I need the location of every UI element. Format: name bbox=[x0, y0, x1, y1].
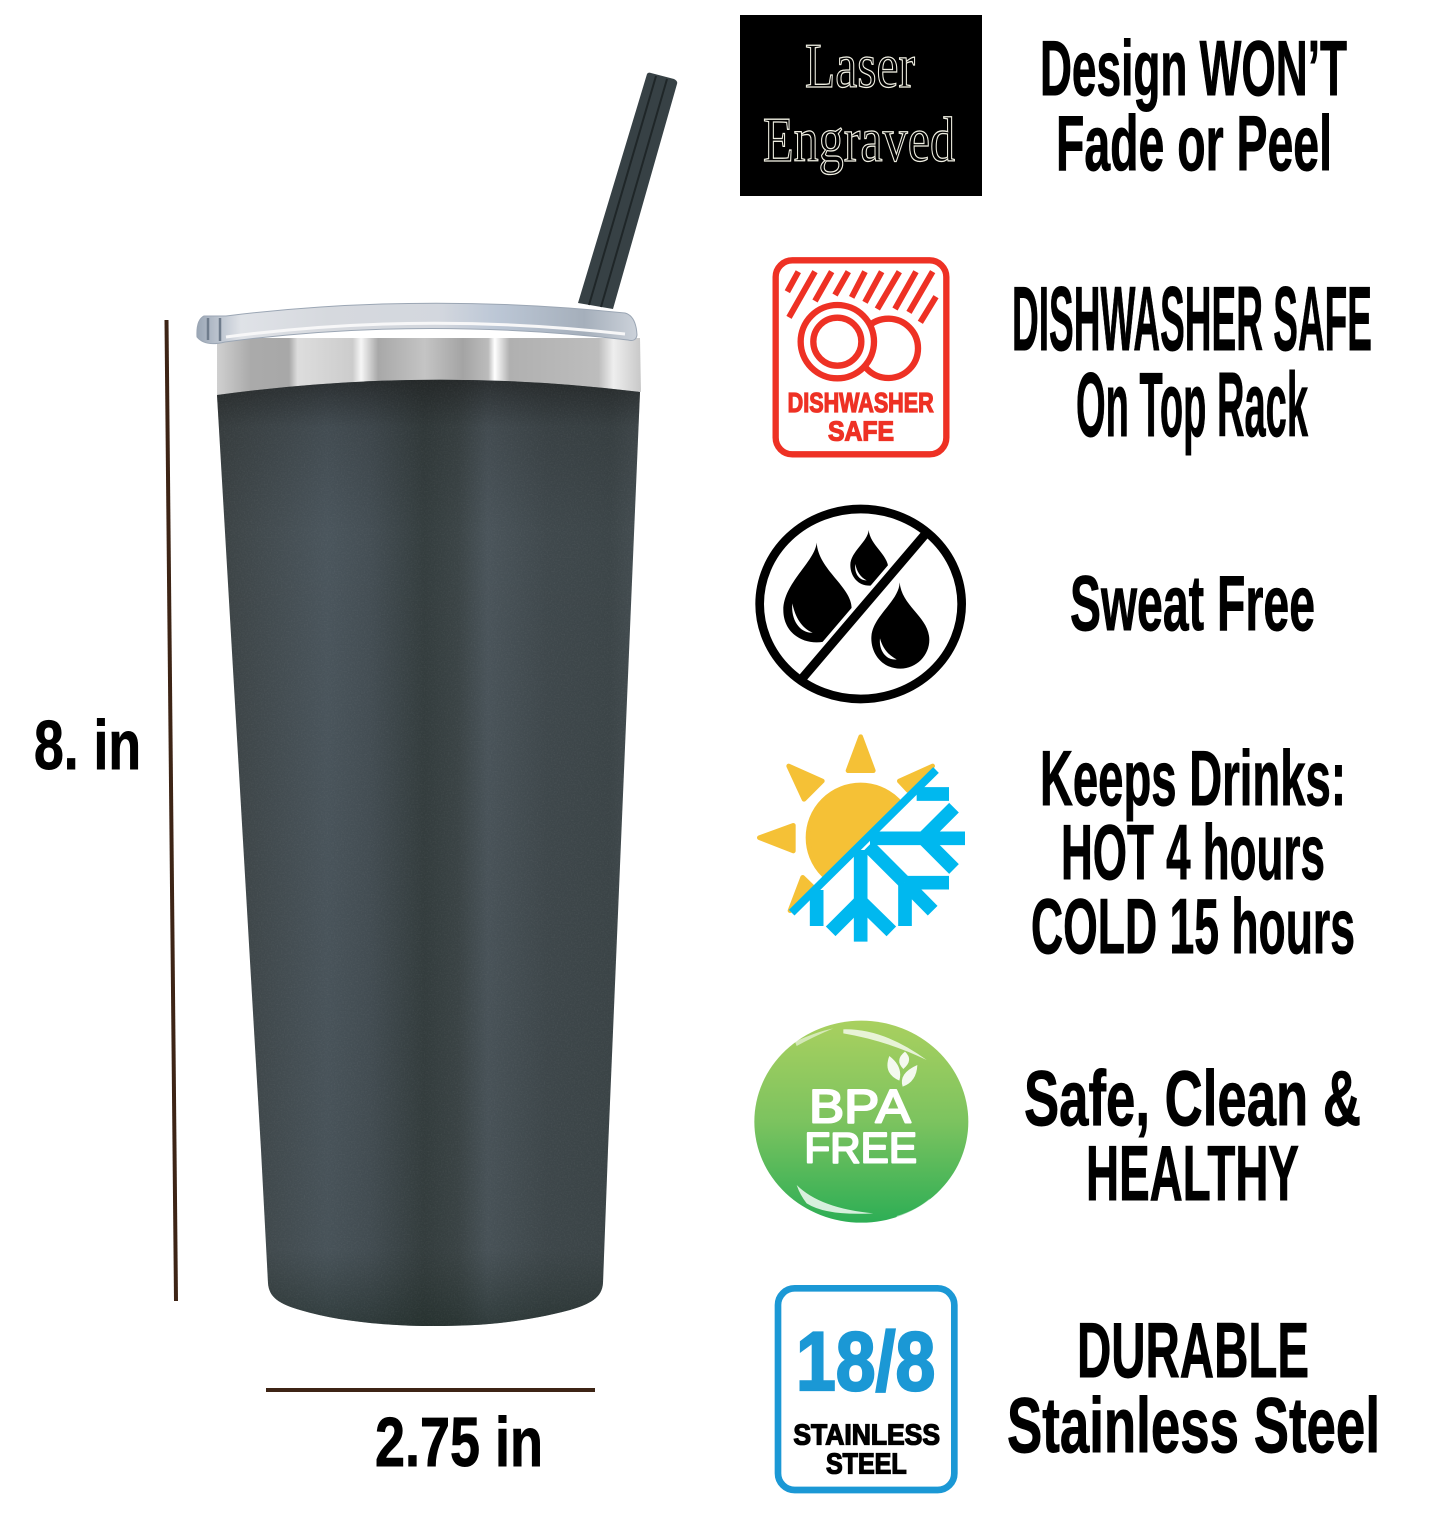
tumbler body bbox=[217, 380, 640, 1326]
icon: dishwasher safe: DISHWASHER bbox=[788, 387, 934, 418]
icon: dishwasher safe: SAFE bbox=[828, 416, 894, 447]
icon: laser engraved plate: Engraved bbox=[763, 105, 955, 175]
text: safe clean healthy: HEALTHY bbox=[1086, 1129, 1299, 1217]
icon: 18/8 stainless steel: STAINLESS bbox=[793, 1419, 940, 1451]
width label: 2.75 in bbox=[375, 1403, 543, 1481]
tumbler bbox=[197, 73, 677, 1326]
icon: 18/8 stainless steel: STEEL bbox=[826, 1449, 907, 1481]
sun half bbox=[759, 737, 933, 911]
icon: dishwasher safe bbox=[776, 260, 946, 454]
icon: 18/8 stainless steel: 18/8 bbox=[796, 1315, 935, 1408]
text: dishwasher safe bbox=[1012, 269, 1372, 456]
snowflake half bbox=[792, 770, 965, 942]
width dimension line bbox=[266, 1388, 595, 1392]
leaves bbox=[887, 1052, 917, 1087]
text: keeps drinks bbox=[1031, 734, 1355, 970]
text: durable stainless steel bbox=[1007, 1306, 1380, 1469]
icon: 18/8 stainless steel bbox=[778, 1288, 954, 1490]
icon: BPA free: FREE bbox=[804, 1125, 917, 1173]
tumbler lid bbox=[197, 303, 637, 344]
icon: laser engraved plate: Laser bbox=[805, 31, 915, 101]
height dimension line bbox=[166, 320, 176, 1301]
tumbler steel band bbox=[217, 338, 641, 395]
text: safe clean healthy bbox=[1024, 1054, 1361, 1217]
text: design won't fade bbox=[1040, 24, 1347, 187]
icon: BPA free: BPA bbox=[809, 1081, 911, 1134]
icon: laser engraved plate bbox=[740, 15, 982, 196]
icon: hot and cold bbox=[759, 737, 965, 942]
icon: BPA free bbox=[754, 1021, 968, 1223]
straw bbox=[578, 73, 677, 309]
icon: sweat free drops bbox=[760, 509, 962, 699]
height label: 8. in bbox=[34, 706, 141, 784]
